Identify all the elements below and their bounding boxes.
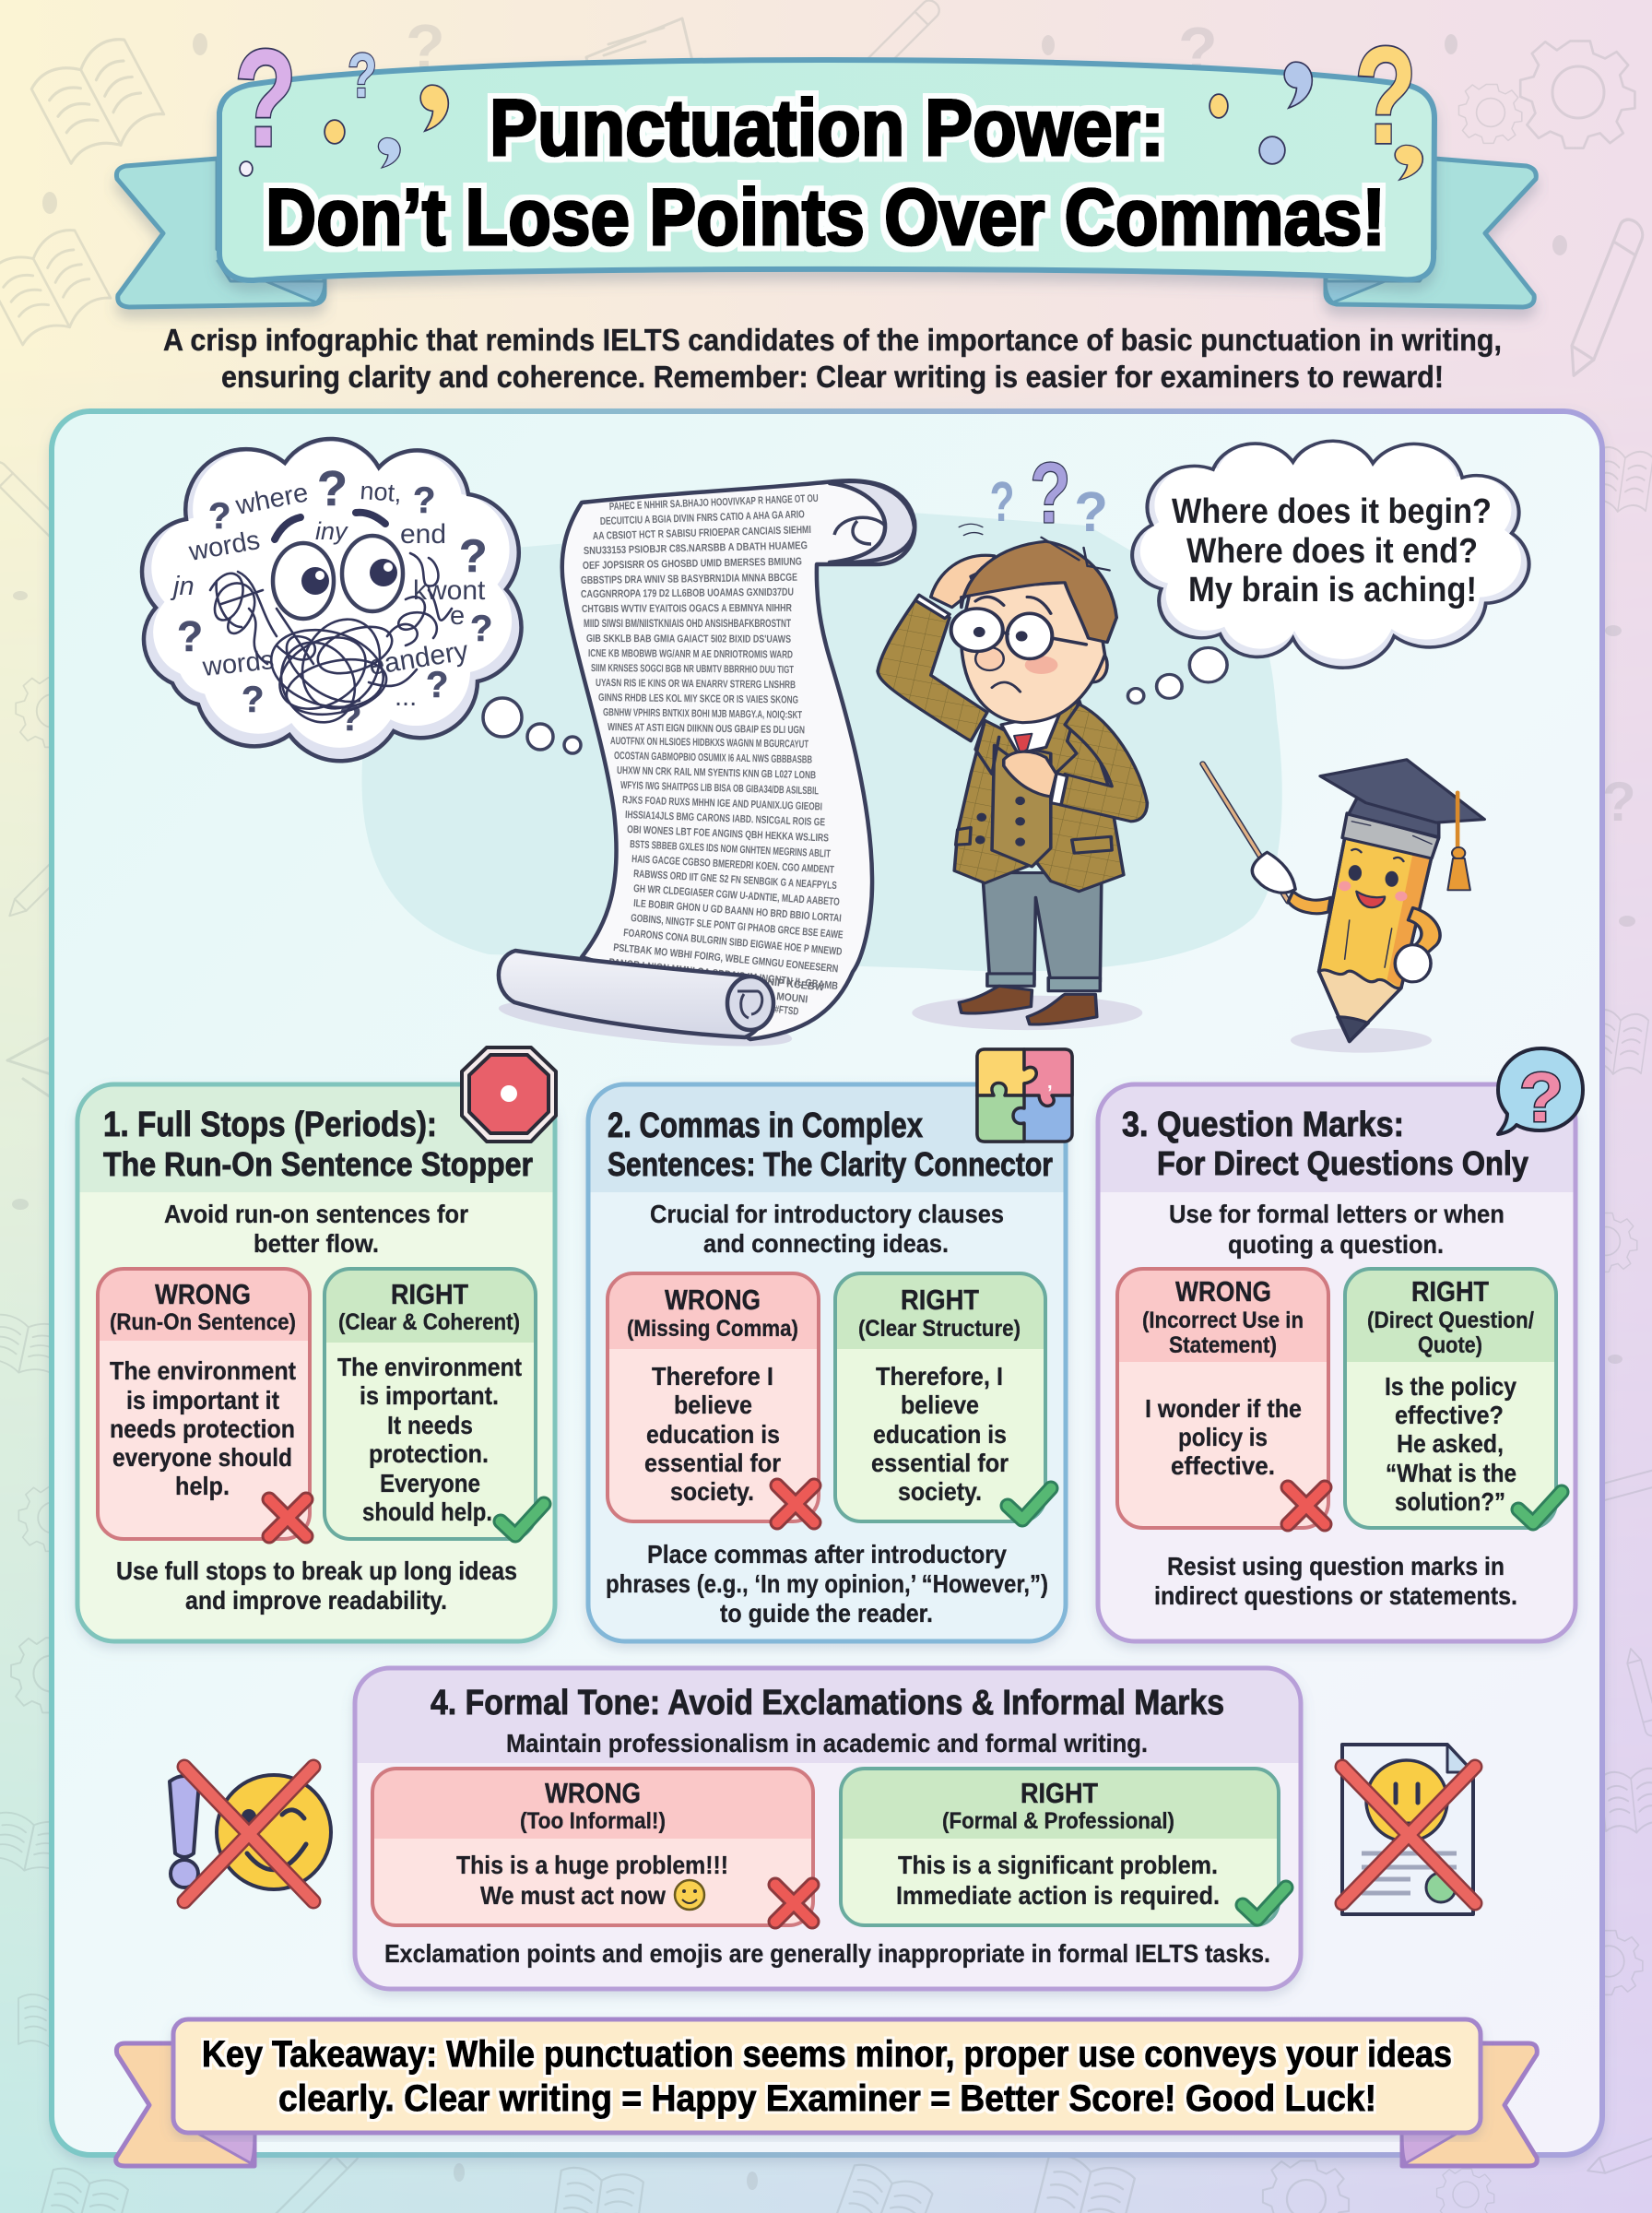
long scroll of run-on text xyxy=(497,480,914,1056)
card 4 wrong box: This is a huge problem!!! xyxy=(456,1851,728,1879)
scroll text lines: WINES AT ASTI EIGN DIIKNN OUS GBAIP ES DLI UGN xyxy=(608,722,805,736)
scroll text lines: OBI WONES LBT FOE ANGINS QBH HEKKA WS.LIRS xyxy=(627,824,829,845)
card 1 wrong box: (Run-On Sentence) xyxy=(110,1309,296,1335)
wrong mark xyxy=(1288,1487,1325,1524)
icon: puzzle xyxy=(977,1049,1072,1142)
card 2 right box: education is xyxy=(873,1420,1007,1449)
floating punctuation right: ? xyxy=(1354,18,1417,172)
card 2 right box: essential for xyxy=(871,1449,1009,1477)
card 1 wrong box xyxy=(98,1269,310,1539)
card 4 wrong box: WRONG xyxy=(545,1777,641,1809)
card 2 heading: 2. Commas in Complex xyxy=(608,1106,923,1145)
scroll text lines: GIB SKKLB BAB GMIA GAIACT 5I02 BIXID DS'UAWS xyxy=(586,633,791,645)
scroll text lines: MIID SIWSI BM/NIISTKNIAIS OHD ANSISHBAFKBROSTNT xyxy=(584,619,791,630)
scroll paper xyxy=(562,480,914,1039)
takeaway text xyxy=(202,2034,1452,2119)
card 2 right box: (Clear Structure) xyxy=(858,1316,1021,1342)
right mark xyxy=(1518,1492,1562,1523)
card 3 wrong box: Statement) xyxy=(1169,1332,1277,1358)
card 1 heading xyxy=(103,1106,533,1183)
card 2 intro xyxy=(650,1200,1004,1258)
card 2 wrong box: WRONG xyxy=(665,1284,761,1316)
icon: puzzle: , xyxy=(1047,1072,1053,1093)
card 3 right box: He asked, xyxy=(1397,1429,1504,1458)
title text xyxy=(266,84,1386,262)
scroll text lines: OCOSTAN GABMOPBIO OSUMIX I6 AAL NWS GBBBASBB xyxy=(614,751,812,766)
card 1 heading: 1. Full Stops (Periods): xyxy=(103,1106,437,1144)
background doodles: ? xyxy=(1602,771,1636,833)
icon: crossed-out exclamation and winking emoji xyxy=(170,1767,331,1901)
card 1 right box: The environment xyxy=(337,1353,522,1381)
banner left tail xyxy=(116,159,324,307)
cloud words: words xyxy=(200,645,276,682)
cloud words: ? xyxy=(459,530,488,582)
scroll text lines: FOARONS CONA BULGRIN SIBD EIGWAE HOE P MNEWD xyxy=(623,928,843,958)
card 1 intro: Avoid run-on sentences for xyxy=(164,1200,468,1228)
resting arm and glove xyxy=(1395,908,1440,982)
takeaway text: Key Takeaway: While punctuation seems minor, proper use conveys your ideas xyxy=(202,2034,1452,2075)
cloud words: end xyxy=(400,519,446,550)
card 2 right box: RIGHT xyxy=(901,1284,979,1316)
pencil mascot xyxy=(1203,760,1484,1053)
card 3 footer note: indirect questions or statements. xyxy=(1154,1581,1517,1610)
card 1: full stops xyxy=(77,1047,556,1641)
card 1 wrong box: help. xyxy=(175,1472,230,1500)
scroll text lines: GOBINS, NINGTF SLE PONT GI PHAOB GRCE BSE EAWE xyxy=(631,913,844,941)
card 2 wrong box: (Missing Comma) xyxy=(627,1316,798,1342)
card 4 right box: RIGHT xyxy=(1021,1777,1098,1809)
scroll text lines: GINNS RHDB LES KOL MIY SKCE OR IS VAIES SKONG xyxy=(598,692,798,706)
cloud words: iny xyxy=(315,517,348,545)
takeaway body xyxy=(173,2019,1481,2133)
card 2 right box xyxy=(835,1273,1051,1521)
card 4 wrong box: (Too Informal!) xyxy=(520,1808,666,1834)
card 3 heading: 3. Question Marks: xyxy=(1122,1106,1404,1144)
card 3 wrong box: I wonder if the xyxy=(1145,1394,1302,1423)
scroll text lines: GBBSTIPS DRA WNIV SB BASYBRN1DIA MNNA BBCGE xyxy=(581,573,797,586)
card 1 right box: It needs xyxy=(387,1411,473,1439)
cloud text xyxy=(1172,492,1492,609)
scroll text lines: ILE BOBIR GHON U GD BAANN HO BRD BBIO LORTAI xyxy=(633,898,842,925)
card 2 heading: Sentences: The Clarity Connector xyxy=(608,1145,1053,1183)
question marks above head: ? xyxy=(1074,480,1108,543)
card 4 right box: Immediate action is required. xyxy=(896,1881,1220,1910)
title banner xyxy=(116,18,1536,307)
wrong mark xyxy=(269,1499,306,1536)
mascot shadow xyxy=(1291,1028,1432,1053)
illustration background blob xyxy=(361,513,1282,971)
subtitle xyxy=(163,323,1502,394)
card 1 footer note xyxy=(116,1556,517,1615)
key takeaway banner xyxy=(116,2019,1537,2166)
cloud words: kwont xyxy=(413,575,486,606)
banner body xyxy=(219,60,1434,280)
card 1 background xyxy=(77,1084,555,1641)
cloud words: ? xyxy=(413,480,435,521)
cloud words: words xyxy=(186,526,262,567)
mascot face xyxy=(1339,849,1408,907)
floating punctuation right xyxy=(1210,18,1422,179)
tweed jacket xyxy=(954,700,1124,892)
card 2 heading xyxy=(608,1106,1053,1183)
floor shadow xyxy=(912,996,1142,1030)
card 1 right box: Everyone xyxy=(380,1469,480,1497)
cloud words: ? xyxy=(426,665,448,705)
left ribbon tail xyxy=(116,2043,254,2166)
scroll text lines: IHSSIA14JLS BMG CARONS IABD. NSICGAL ROIS GE xyxy=(625,810,825,828)
cartoon eyes xyxy=(273,513,403,619)
card 3 heading: For Direct Questions Only xyxy=(1157,1144,1528,1182)
card 3 right box: Quote) xyxy=(1418,1332,1482,1358)
card 3 wrong box: WRONG xyxy=(1175,1275,1271,1308)
card 2 footer note: Place commas after introductory xyxy=(647,1540,1007,1568)
scroll top roll xyxy=(830,481,914,562)
card 4 wrong box: We must act now xyxy=(480,1881,666,1910)
emoji xyxy=(675,1880,704,1910)
takeaway text: clearly. Clear writing = Happy Examiner = Better Score! Good Luck! xyxy=(278,2078,1376,2119)
cloud text: Where does it end? xyxy=(1186,532,1478,571)
icon: question speech bubble: ? xyxy=(1519,1059,1564,1137)
scroll text lines: SIIM KRNSES SOGCI BGB NR UBMTV BBRRHIO DUU TIGT xyxy=(591,663,794,676)
card 4 footer note: Exclamation points and emojis are generally inappropriate in formal IELTS tasks. xyxy=(384,1939,1270,1968)
scroll text lines: RABWSS ORD IIT GNE S2 FN SENBGIK G A NEAFPYLS xyxy=(633,869,837,892)
scroll text lines: #FTSD xyxy=(774,1004,799,1018)
cloud words: ? xyxy=(242,680,264,720)
question marks above head xyxy=(989,444,1108,543)
card 3 right box xyxy=(1345,1269,1562,1528)
card 2 right box: Therefore, I xyxy=(876,1362,1003,1391)
scroll text lines: PANOB LNIGN MMNI GA SBBA'S IM INGNTN IL GBAMB xyxy=(608,957,839,992)
card 2 intro: and connecting ideas. xyxy=(703,1229,949,1258)
title text: Don’t Lose Points Over Commas! xyxy=(266,173,1386,262)
card 4 right box: This is a significant problem. xyxy=(898,1851,1218,1879)
floating punctuation left: ? xyxy=(348,41,377,111)
cloud words: ? xyxy=(208,496,230,537)
card 3 wrong box: (Incorrect Use in xyxy=(1142,1308,1304,1333)
scroll text lines: HAIS GACGE CGBSO BMEREDRI KOEN. CGO AMDENT xyxy=(631,854,834,876)
card 1 footer note: Use full stops to break up long ideas xyxy=(116,1556,517,1585)
card 2 wrong box: education is xyxy=(646,1420,780,1449)
card 3 footer note xyxy=(1154,1552,1517,1610)
right mark xyxy=(1008,1488,1051,1520)
cloud words: ? xyxy=(317,461,348,516)
scroll text lines: AA CBSIOT HCT R SABISU FRIOEPAR CANCIAIS SIEHMI xyxy=(593,525,811,542)
card 3 intro: Use for formal letters or when xyxy=(1169,1200,1504,1228)
card 2 wrong box: essential for xyxy=(644,1449,781,1477)
title text: Punctuation Power: xyxy=(490,84,1164,172)
scroll text lines: AUOTFNX ON HLSIOES HIDBKXS WAGNN M BGURCAYUT xyxy=(610,736,808,751)
card 1 right box: (Clear & Coherent) xyxy=(338,1309,520,1335)
card 2 right box: believe xyxy=(901,1391,979,1419)
cloud words: not, xyxy=(360,477,403,507)
card 3 background xyxy=(1098,1084,1575,1641)
scroll text lines: BSTS SBBEB GXLES IDS NOM GNHTEN MEGRINS ABLIT xyxy=(630,839,831,860)
scroll text lines: UHXW NN CRK RAIL NM SYENTIS KNN GB L027 LONB xyxy=(617,765,816,781)
question marks above head: ? xyxy=(1030,444,1071,542)
scroll text lines: RJKS FOAD RUXS MHHN IGE AND PUANIX.UG GIEOBI xyxy=(622,795,822,813)
wrong mark xyxy=(777,1485,814,1522)
graduation cap xyxy=(1320,760,1484,890)
card 1 intro xyxy=(164,1200,468,1258)
scroll bottom roll xyxy=(499,951,766,1037)
scroll text lines: CHTGBIS WVTIV EYAITOIS OGACS A EBMNYA NIHHR xyxy=(582,603,793,615)
confused man character xyxy=(878,444,1147,1030)
card 4 wrong box xyxy=(372,1769,813,1925)
cloud text: Where does it begin? xyxy=(1172,492,1492,531)
scroll text lines: GBNHW VPHIRS BNTKIX BOHI MJB MABGY.A, NOIQ:SKT xyxy=(603,707,802,721)
scroll text lines: PSLTBAK MO WBHI FOIRG, WBLE GMNGU EONEESERN xyxy=(613,942,839,975)
card 3 heading xyxy=(1122,1106,1528,1182)
scroll text lines: WFYIS IWG SHAITPGS LIB BISA OB GIBA34/DB ASILSBIL xyxy=(620,780,819,797)
cloud words: ? xyxy=(177,612,203,660)
icon: crossed-out document with emoji xyxy=(1342,1745,1475,1914)
icon: question speech bubble xyxy=(1498,1048,1583,1137)
background doodles: ? xyxy=(406,11,445,83)
scroll text lines: ICNE KB MBOBWB WG/ANR M AE DNRIOTROMIS WARD xyxy=(588,648,793,661)
card 1 heading: The Run-On Sentence Stopper xyxy=(103,1145,533,1183)
card 3 right box: RIGHT xyxy=(1411,1275,1489,1308)
card 4 right box xyxy=(841,1769,1286,1925)
card 2 wrong box: believe xyxy=(674,1391,752,1419)
card 3 intro: quoting a question. xyxy=(1228,1230,1444,1259)
pencil body xyxy=(1319,838,1432,1042)
floating punctuation left xyxy=(234,20,448,175)
card 3: question marks xyxy=(1098,1048,1583,1641)
icon: stop sign xyxy=(462,1047,556,1142)
head xyxy=(951,538,1116,723)
card 3 right box: effective? xyxy=(1395,1401,1504,1429)
card 3 right box: solution?” xyxy=(1395,1487,1505,1516)
thought cloud: speech text xyxy=(1127,441,1529,704)
card 4 heading: 4. Formal Tone: Avoid Exclamations & Informal Marks xyxy=(431,1684,1224,1722)
scroll text lines: MOUNI xyxy=(776,991,808,1006)
card 3 wrong box: policy is xyxy=(1178,1423,1268,1451)
card 2 intro: Crucial for introductory clauses xyxy=(650,1200,1004,1228)
card 2 wrong box xyxy=(608,1273,819,1522)
subtitle: ensuring clarity and coherence. Remember: Clear writing is easier for examiners to reward! xyxy=(221,360,1444,394)
card 1 right box xyxy=(324,1269,544,1539)
raised arm and hand xyxy=(878,524,995,741)
card 2 footer note: to guide the reader. xyxy=(720,1599,933,1627)
cloud words: e xyxy=(450,601,465,631)
right mark xyxy=(1243,1888,1286,1919)
trousers and shoes xyxy=(959,873,1102,1024)
card 1 wrong box: The environment xyxy=(110,1356,296,1385)
cloud words: ? xyxy=(470,609,492,649)
card 1 wrong box: everyone should xyxy=(112,1443,292,1472)
scroll text lines: NIP KCEBW xyxy=(767,976,825,993)
card 1 wrong box: WRONG xyxy=(155,1278,251,1310)
pointer stick xyxy=(1203,763,1288,902)
cloud words: jn xyxy=(170,572,195,601)
card 3 wrong box xyxy=(1117,1269,1328,1528)
card 3 footer note: Resist using question marks in xyxy=(1167,1552,1504,1580)
card 1 right box: protection. xyxy=(369,1439,489,1468)
cloud words: eandery xyxy=(367,635,470,681)
card 2 right box: society. xyxy=(898,1477,982,1506)
lowered arm and hand xyxy=(1004,704,1147,822)
floating punctuation left: ? xyxy=(234,20,297,175)
card 3 right box: “What is the xyxy=(1386,1459,1516,1487)
card 3 wrong box: effective. xyxy=(1171,1451,1275,1480)
thought cloud: confused brain xyxy=(142,439,521,761)
card 2 footer note xyxy=(606,1540,1048,1627)
right mark xyxy=(501,1504,544,1535)
scroll text lines: UYASN RIS IE KINS OR WA ENARRV STRERG LNSHRB xyxy=(596,678,796,691)
card 4 background xyxy=(355,1668,1301,1989)
card 1 wrong box: needs protection xyxy=(110,1414,295,1443)
card 2 footer note: phrases (e.g., ‘In my opinion,’ “However,”) xyxy=(606,1569,1048,1598)
right ribbon tail xyxy=(1402,2043,1537,2166)
question marks above head: ? xyxy=(989,470,1015,533)
card 1 footer note: and improve readability. xyxy=(185,1586,447,1615)
scroll text lines xyxy=(581,493,844,1018)
card 3 right box: (Direct Question/ xyxy=(1367,1308,1534,1333)
card 3 intro xyxy=(1169,1200,1504,1259)
card 4 intro: Maintain professionalism in academic and formal writing. xyxy=(506,1729,1148,1757)
card 2 wrong box: society. xyxy=(670,1477,754,1506)
scroll text lines: CAGGNRROPA 179 D2 LL6BOB UOAMAS GXNID37DU xyxy=(581,587,794,600)
card 1 wrong box: is important it xyxy=(126,1386,279,1414)
card 2 wrong box: Therefore I xyxy=(652,1362,773,1391)
cloud text: My brain is aching! xyxy=(1188,571,1477,609)
banner right tail xyxy=(1326,159,1536,307)
scroll text lines: DECUITCIU A BGIA DIVIN FNRS CATIO A AHA GA ARIO xyxy=(600,509,805,527)
card 2 background xyxy=(588,1084,1066,1641)
card 1 right box: RIGHT xyxy=(391,1278,468,1310)
card 4 right box: (Formal & Professional) xyxy=(942,1808,1174,1834)
card 1 right box: should help. xyxy=(362,1497,492,1526)
subtitle: A crisp infographic that reminds IELTS candidates of the importance of basic punctuation in writing, xyxy=(163,323,1502,357)
cloud outline xyxy=(1127,441,1529,704)
card 2: commas xyxy=(588,1049,1072,1641)
scroll text lines: OEF JOPSISRR OS GHOSBD UMID BMERSES BMIUNG xyxy=(583,556,802,572)
scroll text lines: PAHEC E NHHIR SA.BHAJO HOOVIVKAP R HANGE OT OU xyxy=(609,493,819,513)
scroll shadow xyxy=(497,991,794,1056)
cloud words: ... xyxy=(395,682,417,712)
scroll text lines: SNU33153 PSIOBJR C8S.NARSBB A DBATH HUAMEG xyxy=(584,540,808,557)
cloud words: where xyxy=(232,478,311,521)
main panel xyxy=(52,411,1602,2155)
card 1 intro: better flow. xyxy=(254,1229,379,1258)
thought bubbles: left xyxy=(483,698,581,753)
wrong mark xyxy=(775,1885,812,1922)
pointing arm and glove xyxy=(1252,852,1330,914)
card 1 right box: is important. xyxy=(360,1381,499,1410)
scroll text lines: GH WR CLDEGIA5ER CGIW U-ADNTIE, MLAD AABETO xyxy=(633,883,840,908)
cloud words xyxy=(170,461,492,739)
cloud words: ? xyxy=(339,698,361,739)
background doodles: ? xyxy=(1178,14,1218,86)
card 3 right box: Is the policy xyxy=(1385,1372,1516,1401)
scribble tangles xyxy=(210,553,452,736)
card 4: formal tone xyxy=(355,1668,1301,1989)
